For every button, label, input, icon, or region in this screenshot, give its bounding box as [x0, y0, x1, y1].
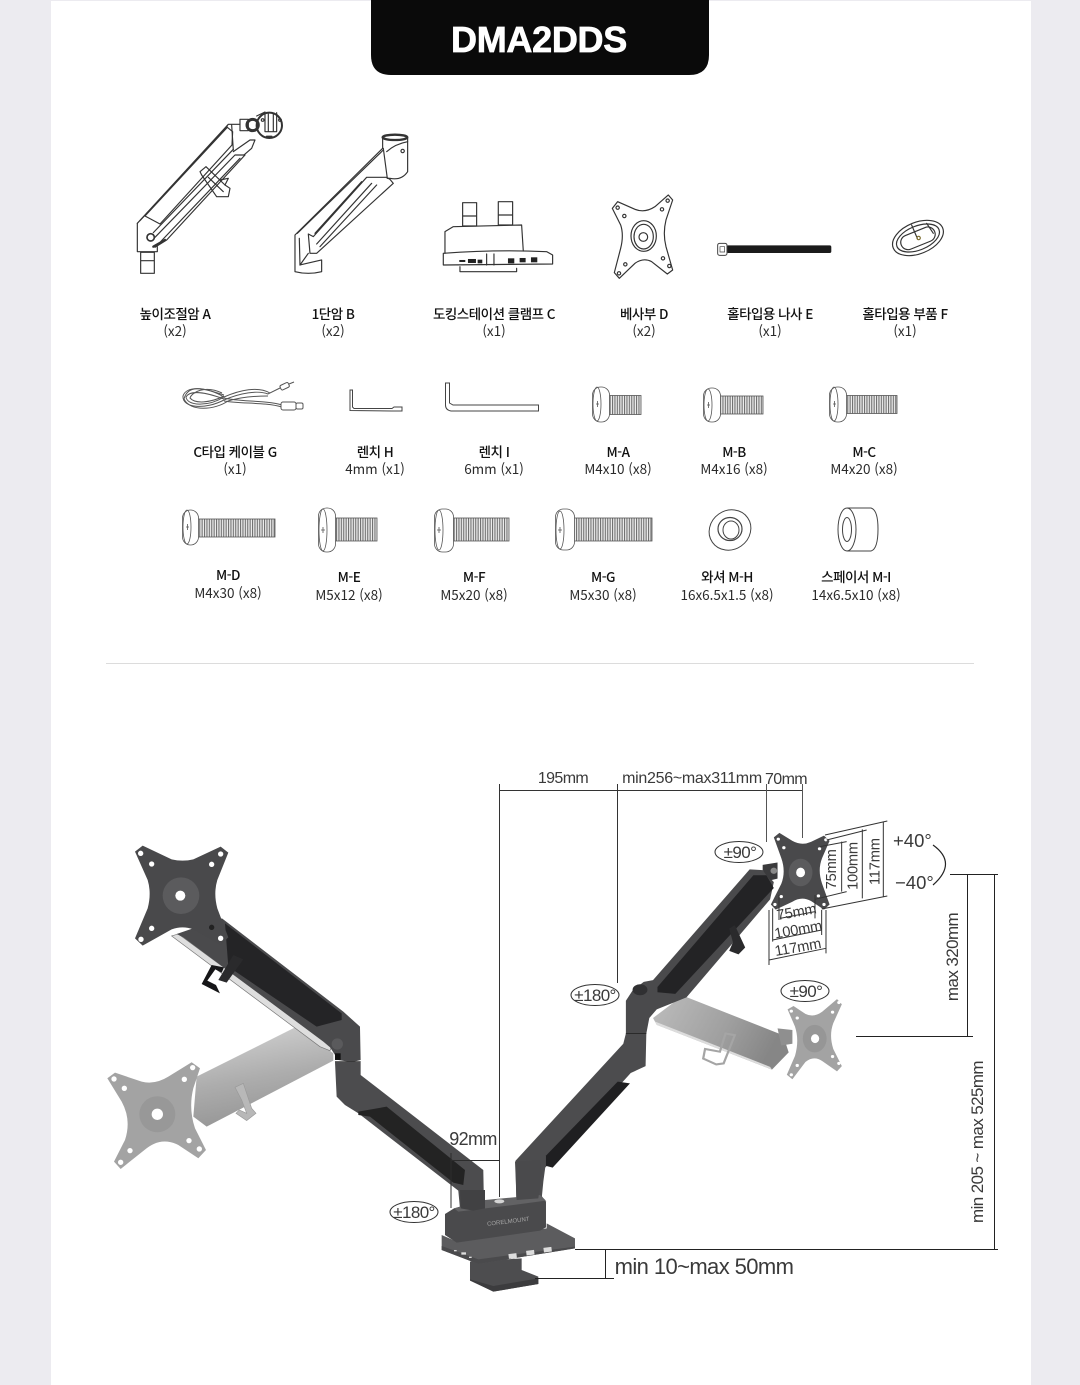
label: M-B: [722, 441, 746, 461]
part G: type-C cable: [183, 382, 303, 478]
ghost right arm: [653, 996, 842, 1079]
dimension diagram: [107, 770, 998, 1292]
label: 높이조절암 A: [140, 303, 211, 323]
label: (x1): [758, 320, 782, 340]
part A: height adjustable arm: [137, 112, 282, 340]
rotation badge: ±180 right: ±180°: [574, 986, 616, 1005]
icon: screw M-D: [182, 510, 275, 545]
label: desk thickness: min 10~max 50mm: [615, 1254, 793, 1279]
label: M4x16 (x8): [700, 458, 768, 478]
icon: screw M-B: [704, 388, 763, 422]
label: 70mm: 70mm: [765, 771, 807, 788]
label: min 205 ~ max 525mm: min 205 ~ max 525mm: [968, 1061, 987, 1223]
VESA spacing dimensions: 75mm: [776, 901, 818, 924]
tilt range +40 / -40: [893, 830, 946, 893]
left VESA plate: [135, 846, 228, 946]
part M-E screw: [315, 508, 383, 604]
label: 도킹스테이션 클램프 C: [433, 303, 556, 323]
label: (x1): [893, 320, 917, 340]
label: max 320mm: max 320mm: [943, 912, 962, 1001]
desk clamp base: [442, 1160, 575, 1292]
icon: VESA plate: [612, 195, 673, 278]
label: 홀타입용 부품 F: [862, 303, 948, 323]
label: C타입 케이블 G: [193, 441, 277, 461]
part F: through-hole plate: [862, 213, 949, 340]
lower right arm: [515, 1033, 646, 1200]
parts row 2: [183, 382, 898, 478]
icon: screw M-F: [434, 509, 509, 552]
VESA spacing dimensions: 100mm: [846, 842, 862, 890]
parts row 3: [182, 502, 901, 604]
clamp hook: [729, 925, 745, 954]
part H: wrench 4mm: [345, 390, 405, 478]
icon: arm B: [295, 135, 408, 273]
icon: screw M-A: [592, 387, 641, 422]
icon: washer: [701, 502, 759, 558]
icon: wrench H: [350, 390, 402, 411]
clamp hook: [202, 955, 243, 993]
label: (x2): [321, 320, 345, 340]
label: 195mm: 195mm: [538, 770, 588, 787]
VESA spacing dimensions: 100mm: [773, 918, 823, 942]
ghost left arm: [107, 1027, 333, 1169]
upper left arm: [177, 918, 361, 1062]
label: M5x30 (x8): [569, 584, 637, 604]
label: 스페이서 M-I: [821, 566, 891, 586]
icon: arm A: [137, 112, 282, 273]
rotation badge: ±90 ghost: [781, 980, 829, 1002]
part C: docking station clamp: [433, 202, 556, 340]
part E: through-hole bolt: [718, 243, 831, 340]
part B: single arm: [295, 135, 408, 340]
rotation badge: ±90 top: ±90°: [724, 843, 756, 862]
label: M4x20 (x8): [830, 458, 898, 478]
lower left arm: [335, 1062, 484, 1208]
height dimension lines: [535, 874, 998, 1278]
label: 1단암 B: [312, 303, 355, 323]
label: (x2): [632, 320, 656, 340]
part M-I spacer: [811, 508, 901, 604]
label: M-E: [338, 566, 361, 586]
dimension: 92mm: 92mm: [449, 1129, 497, 1149]
label: 4mm (x1): [345, 458, 405, 478]
icon: cable: [183, 382, 303, 410]
icon: bolt: [718, 243, 831, 255]
label: 렌치 H: [357, 441, 393, 461]
icon: screw M-E: [318, 508, 377, 552]
rotation badge: ±90 top: [715, 842, 763, 862]
upper right arm: [626, 869, 774, 1033]
label: 렌치 I: [479, 441, 509, 461]
part I: wrench 6mm: [446, 383, 538, 478]
icon: wrench I: [446, 383, 538, 411]
label: M4x30 (x8): [194, 582, 262, 602]
icon: spacer: [838, 508, 878, 551]
VESA spacing dimensions: [769, 821, 887, 965]
label: 14x6.5x10 (x8): [811, 584, 901, 604]
label: 와셔 M-H: [701, 566, 753, 586]
label: 홀타입용 나사 E: [727, 303, 813, 323]
parts row 1: [137, 112, 949, 340]
tilt range +40 / -40: +40°: [893, 830, 932, 851]
desk clamp base: CORELMOUNT: [487, 1217, 530, 1228]
tilt range +40 / -40: −40°: [895, 872, 934, 893]
left arm: [135, 846, 484, 1208]
label: M-A: [607, 441, 631, 461]
title tab: DMA2DDS: [451, 19, 627, 60]
silver strip under arm: [172, 934, 332, 1051]
label: M-G: [591, 566, 615, 586]
rotation badge: ±180 left: ±180°: [393, 1203, 435, 1222]
label: 16x6.5x1.5 (x8): [680, 584, 774, 604]
right VESA plate: [771, 833, 830, 910]
part M-H washer: [680, 502, 774, 604]
part M-B screw: [700, 388, 768, 478]
icon: docking clamp: [443, 202, 553, 272]
icon: oval bracket: [887, 213, 949, 263]
VESA spacing dimensions: 117mm: [774, 936, 822, 960]
right arm: [515, 833, 830, 1200]
part D: VESA plate: [612, 195, 673, 340]
dimension: top width line: [499, 784, 803, 1197]
icon: screw M-G: [556, 509, 652, 550]
label: 베사부 D: [620, 303, 668, 323]
part M-G screw: [556, 509, 652, 604]
label: (x1): [223, 458, 247, 478]
label: M5x12 (x8): [315, 584, 383, 604]
part M-D screw: [182, 510, 275, 602]
label: min256~max311mm: min256~max311mm: [622, 770, 762, 787]
label: M-C: [852, 441, 876, 461]
label: M5x20 (x8): [440, 584, 508, 604]
title tab: [371, 0, 709, 75]
label: M4x10 (x8): [584, 458, 652, 478]
tilt joint: [763, 863, 778, 880]
rotation badge: ±90 ghost: ±90°: [790, 982, 822, 1001]
dimension: 92mm: [449, 1129, 500, 1208]
VESA spacing dimensions: 117mm: [867, 838, 883, 885]
part M-C screw: [830, 387, 898, 478]
icon: screw M-C: [830, 387, 897, 422]
label: M-D: [216, 564, 240, 584]
label: (x1): [482, 320, 506, 340]
label: 6mm (x1): [464, 458, 524, 478]
part M-F screw: [434, 509, 509, 604]
label: (x2): [163, 320, 187, 340]
part M-A screw: [584, 387, 652, 478]
label: M-F: [463, 566, 486, 586]
VESA spacing dimensions: 75mm: [824, 849, 840, 889]
